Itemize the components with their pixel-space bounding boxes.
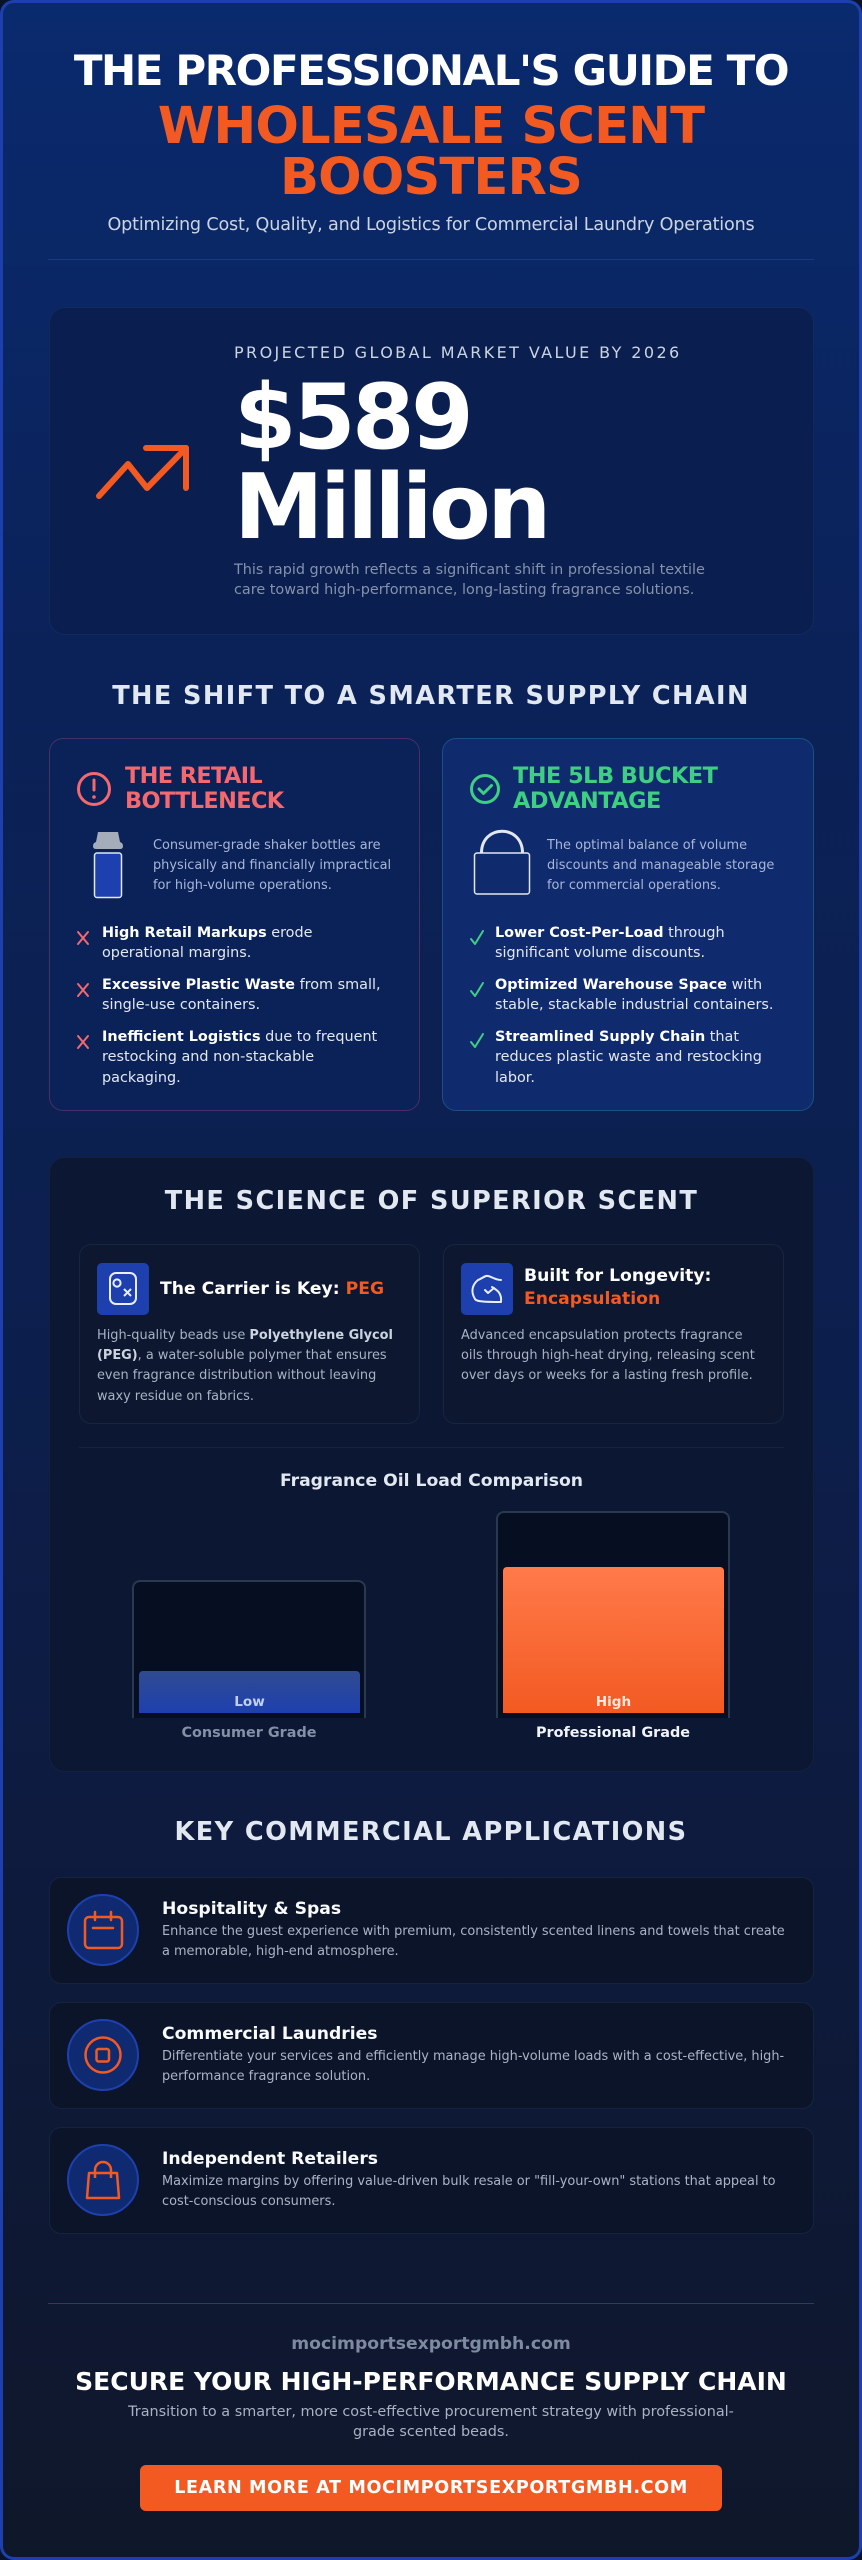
retailers text: Maximize margins by offering value-driven bulk resale or "fill-your-own" stations that appeal to — [162, 2174, 776, 2189]
website: mocimportsexportgmbh.com — [291, 2334, 571, 2354]
laundries text: performance fragrance solution. — [162, 2069, 370, 2084]
heading: science: THE SCIENCE OF SUPERIOR SCENT — [165, 1186, 698, 1216]
market description: care toward high-performance, long-lasting fragrance solutions. — [234, 582, 694, 598]
retail heading: BOTTLENECK — [125, 788, 284, 814]
list item: markups — [102, 925, 312, 961]
panel: retail bottleneck — [49, 738, 420, 1111]
encapsulation text: Advanced encapsulation protects fragrance — [461, 1328, 743, 1343]
icon: encapsulation — [461, 1263, 513, 1315]
encapsulation text: over days or weeks for a lasting fresh profile. — [461, 1368, 753, 1383]
high fill: High — [596, 1694, 631, 1710]
market label: PROJECTED GLOBAL MARKET VALUE BY 2026 — [234, 343, 682, 362]
bar: professional grade — [496, 1511, 730, 1718]
laundries text: Differentiate your services and efficiently manage high-volume loads with a cost-effective, high- — [162, 2049, 784, 2064]
icon: warning — [77, 772, 111, 806]
carrier title: The Carrier is Key: PEG — [160, 1279, 384, 1299]
footer call to action — [75, 2334, 787, 2511]
list item: supply chain: reduces plastic waste and restocking — [495, 1049, 762, 1065]
list item: cost — [495, 925, 725, 961]
bucket intro — [546, 838, 774, 893]
list item: plastic waste: Excessive Plastic Waste from small, — [102, 977, 381, 993]
list item: logistics — [102, 1029, 377, 1086]
carrier text: High-quality beads use Polyethylene Glycol — [97, 1328, 393, 1343]
icon: shopping bag — [67, 2144, 139, 2216]
list item: markups: High Retail Markups erode — [102, 925, 312, 941]
card: laundries — [49, 2002, 814, 2109]
bar: consumer grade — [132, 1580, 366, 1718]
list item: markups: operational margins. — [102, 945, 251, 961]
card: carrier — [79, 1244, 420, 1424]
list item: logistics: Inefficient Logistics due to frequent — [102, 1029, 377, 1045]
icon: bucket — [474, 830, 530, 895]
cta button: LEARN MORE AT MOCIMPORTSEXPORTGMBH.COM — [174, 2478, 688, 2498]
retailers text: cost-conscious consumers. — [162, 2194, 335, 2209]
title highlight: BOOSTERS — [280, 147, 582, 207]
market value figure: Million — [234, 455, 548, 560]
cta text: Transition to a smarter, more cost-effective procurement strategy with professional- — [128, 2404, 734, 2420]
bucket heading — [513, 763, 718, 814]
list item: supply chain — [495, 1029, 762, 1086]
panel: science — [49, 1157, 814, 1772]
bucket heading: ADVANTAGE — [513, 788, 661, 814]
list item: supply chain: Streamlined Supply Chain that — [495, 1029, 739, 1045]
label: consumer grade: Consumer Grade — [181, 1725, 317, 1741]
list item: cost: Lower Cost-Per-Load through — [495, 925, 725, 941]
market value figure — [234, 365, 548, 560]
laundries title: Commercial Laundries — [162, 2024, 378, 2044]
card: retailers — [49, 2127, 814, 2234]
retail heading: THE RETAIL — [125, 763, 262, 789]
list item: warehouse: stable, stackable industrial containers. — [495, 997, 774, 1013]
icon: check marks — [470, 930, 484, 1048]
bucket intro: for commercial operations. — [547, 878, 721, 893]
retail heading — [125, 763, 285, 814]
retail intro — [153, 838, 391, 893]
list item: plastic waste — [102, 977, 381, 1013]
retailers text — [162, 2174, 776, 2209]
label: professional grade: Professional Grade — [536, 1725, 690, 1741]
list item: warehouse: Optimized Warehouse Space with — [495, 977, 762, 993]
low fill: Low — [234, 1694, 265, 1710]
icon: trending arrow — [96, 445, 189, 499]
bucket intro: The optimal balance of volume — [547, 838, 747, 853]
list item: cost: significant volume discounts. — [495, 945, 705, 961]
header — [74, 46, 788, 235]
bucket heading: THE 5LB BUCKET — [513, 763, 717, 789]
encapsulation text — [461, 1328, 755, 1383]
cta button — [140, 2465, 722, 2511]
hospitality text: Enhance the guest experience with premium, consistently scented linens and towels that create — [162, 1924, 785, 1939]
title highlight — [158, 96, 705, 207]
icon: cross marks — [77, 931, 89, 1049]
retailers title: Independent Retailers — [162, 2149, 378, 2169]
high fill — [503, 1567, 724, 1713]
list item: plastic waste: single-use containers. — [102, 997, 260, 1013]
encapsulation title: Built for Longevity: — [524, 1266, 711, 1286]
icon: shaker bottle — [93, 832, 123, 898]
icon: check circle — [470, 774, 500, 804]
laundries text — [162, 2049, 784, 2084]
heading: supply chain: THE SHIFT TO A SMARTER SUPPLY CHAIN — [112, 681, 750, 711]
title highlight: WHOLESALE SCENT — [158, 96, 704, 156]
subtitle: Optimizing Cost, Quality, and Logistics for Commercial Laundry Operations — [107, 215, 755, 235]
icon: calendar — [67, 1894, 139, 1966]
hospitality title: Hospitality & Spas — [162, 1899, 341, 1919]
panel: bucket advantage — [442, 738, 814, 1111]
retail intro: Consumer-grade shaker bottles are — [153, 838, 381, 853]
list item: supply chain: labor. — [495, 1070, 535, 1086]
market value figure: $589 — [234, 365, 470, 470]
card: encapsulation — [443, 1244, 784, 1424]
encapsulation title: Encapsulation — [524, 1289, 660, 1309]
chart title: Fragrance Oil Load Comparison — [280, 1471, 583, 1491]
cta text: grade scented beads. — [353, 2424, 509, 2440]
carrier text — [97, 1328, 393, 1404]
encapsulation title — [524, 1266, 711, 1309]
bucket intro: discounts and manageable storage — [547, 858, 774, 873]
card: hospitality — [49, 1877, 814, 1984]
hospitality text: a memorable, high-end atmosphere. — [162, 1944, 399, 1959]
retail intro: for high-volume operations. — [153, 878, 332, 893]
title line: THE PROFESSIONAL'S GUIDE TO — [74, 46, 788, 95]
retail intro: physically and financially impractical — [153, 858, 391, 873]
market description — [234, 562, 705, 598]
list item: logistics: restocking and non-stackable — [102, 1049, 314, 1065]
list item: logistics: packaging. — [102, 1070, 181, 1086]
carrier text: (PEG), a water-soluble polymer that ensures — [97, 1348, 387, 1363]
low fill — [139, 1671, 360, 1713]
cta heading: SECURE YOUR HIGH-PERFORMANCE SUPPLY CHAIN — [75, 2367, 787, 2396]
chart: fragrance oil load — [132, 1471, 730, 1741]
cta text — [128, 2404, 734, 2440]
icon: carrier — [97, 1263, 149, 1315]
panel: market value — [49, 307, 814, 635]
hospitality text — [162, 1924, 785, 1959]
encapsulation text: oils through high-heat drying, releasing scent — [461, 1348, 755, 1363]
carrier text: waxy residue on fabrics. — [97, 1389, 254, 1404]
carrier text: even fragrance distribution without leaving — [97, 1368, 376, 1383]
list item: warehouse — [495, 977, 774, 1013]
heading: applications: KEY COMMERCIAL APPLICATIONS — [175, 1817, 687, 1847]
icon: washer — [67, 2019, 139, 2091]
market description: This rapid growth reflects a significant shift in professional textile — [234, 562, 705, 578]
